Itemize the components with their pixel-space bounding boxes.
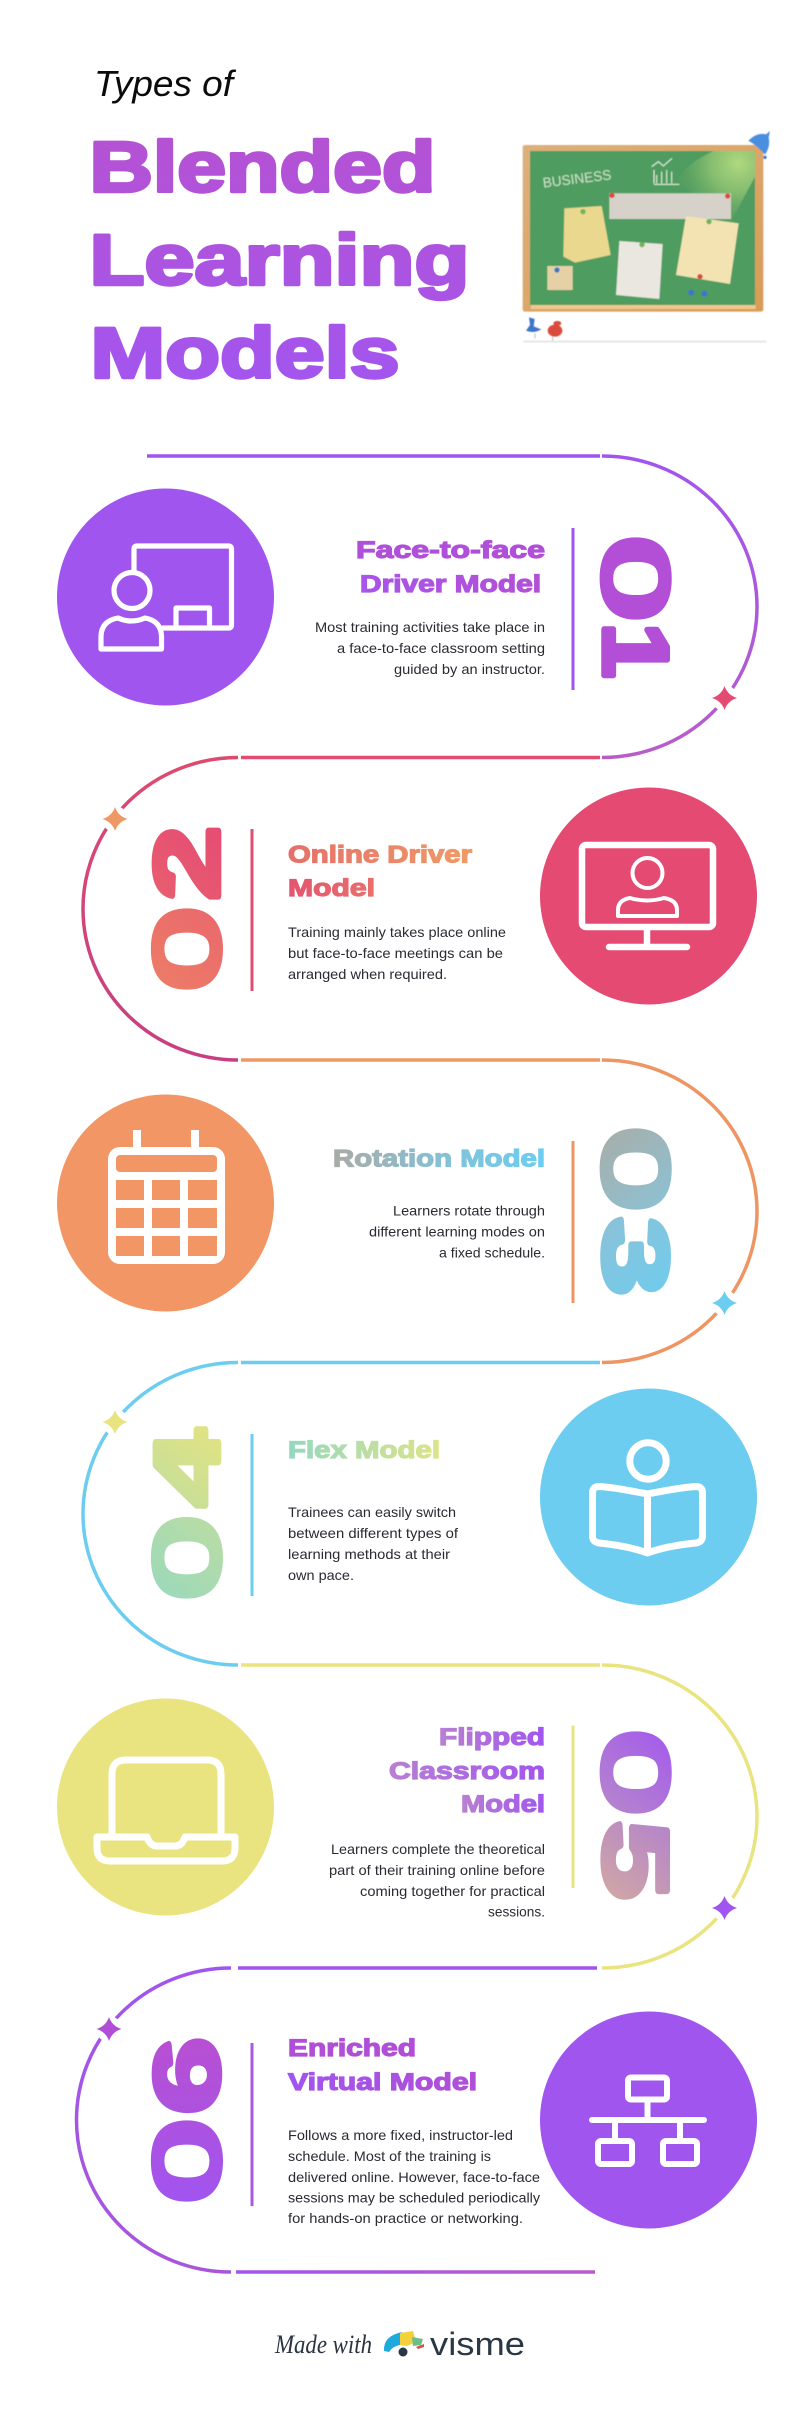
- divider line: [572, 1726, 574, 1888]
- script text: Made with: Made with: [274, 2330, 372, 2359]
- number 06: 0: [137, 2120, 239, 2202]
- description: a fixed schedule.: [439, 1244, 545, 1260]
- description: Training mainly takes place online: [288, 924, 506, 940]
- heading: Flex Model: [288, 1437, 440, 1464]
- description: Learners complete the theoretical: [331, 1841, 545, 1857]
- heading: Online Driver: [288, 842, 472, 868]
- heading: [356, 537, 545, 598]
- panel 06: Enriched Virtual Model: [96, 2012, 757, 2228]
- heading: [389, 1724, 545, 1818]
- title: Types of Blended Learning Models: [90, 63, 470, 394]
- heading: Face-to-face: [356, 537, 545, 564]
- star marker: [712, 685, 738, 711]
- wordmark: visme: visme: [430, 2326, 525, 2362]
- heading: [288, 2035, 477, 2096]
- description: for hands-on practice or networking.: [288, 2210, 523, 2226]
- panel 03: Rotation Model: [57, 1094, 738, 1316]
- description: [315, 619, 545, 677]
- heading: Flipped: [439, 1724, 545, 1751]
- description: [288, 924, 506, 982]
- description: schedule. Most of the training is: [288, 2148, 491, 2164]
- divider line: [572, 1141, 574, 1303]
- description: Most training activities take place in: [315, 619, 545, 635]
- description: sessions.: [488, 1904, 545, 1920]
- description: learning methods at their: [288, 1546, 450, 1562]
- number 02: [137, 826, 239, 990]
- description: [288, 2127, 540, 2226]
- icon circle: network hierarchy: [540, 2012, 757, 2228]
- number 04: 4: [137, 1430, 239, 1507]
- timeline path connecting the six models: [76, 456, 757, 2272]
- description: part of their training online before: [329, 1862, 545, 1878]
- heading: Rotation Model: [333, 1146, 545, 1172]
- icon circle: monitor with person: [540, 788, 757, 1004]
- icon: visme logo: [384, 2331, 424, 2356]
- icon circle: calendar: [57, 1094, 274, 1312]
- description: arranged when required.: [288, 966, 447, 982]
- illustration: green bulletin board with notes and pins: BUSINESS: [542, 166, 612, 191]
- divider line: [250, 829, 254, 991]
- number 05: [584, 1731, 686, 1900]
- description: [369, 1202, 545, 1260]
- panel 05: Flipped Classroom Model: [57, 1698, 738, 1921]
- description: Trainees can easily switch: [288, 1504, 456, 1520]
- star marker: [712, 1895, 738, 1921]
- number 05: 0: [584, 1731, 686, 1814]
- panel 01: Face-to-face Driver Model: [57, 488, 738, 711]
- number 03: 3: [584, 1218, 686, 1296]
- description: delivered online. However, face-to-face: [288, 2169, 540, 2185]
- star marker: [712, 1290, 738, 1316]
- description: coming together for practical: [360, 1883, 545, 1899]
- number 04: [137, 1430, 239, 1599]
- heading: Virtual Model: [288, 2069, 477, 2096]
- star marker: [102, 806, 128, 832]
- heading: Model: [461, 1791, 545, 1818]
- panel 04: Flex Model: [102, 1388, 757, 1606]
- description: Follows a more fixed, instructor-led: [288, 2127, 513, 2143]
- star marker: [102, 1409, 128, 1435]
- description: Learners rotate through: [393, 1202, 545, 1218]
- number 05: 5: [584, 1821, 686, 1900]
- number 01: 0: [584, 537, 686, 620]
- number 02: 2: [137, 826, 239, 900]
- description: [329, 1841, 545, 1920]
- description: but face-to-face meetings can be: [288, 945, 503, 961]
- description: guided by an instructor.: [394, 661, 545, 677]
- description: between different types of: [288, 1525, 458, 1541]
- title line: Types of: Types of: [94, 63, 237, 104]
- description: own pace.: [288, 1567, 354, 1583]
- number 01: 1: [584, 623, 686, 678]
- heading: Model: [288, 875, 375, 902]
- icon circle: person reading book: [540, 1388, 757, 1606]
- number 04: 0: [137, 1517, 239, 1599]
- description: sessions may be scheduled periodically: [288, 2190, 540, 2206]
- heading: Enriched: [288, 2035, 416, 2062]
- divider line: [250, 1434, 254, 1596]
- number 03: [584, 1128, 686, 1296]
- divider line: [572, 528, 574, 690]
- star marker: [96, 2016, 122, 2042]
- icon circle: instructor at board: [57, 488, 274, 706]
- title line: Models: Models: [90, 314, 400, 394]
- title line: Blended: Blended: [90, 128, 436, 208]
- heading: [288, 842, 472, 902]
- number 06: [137, 2038, 239, 2202]
- illustration: green bulletin board with notes and pins: [523, 131, 770, 342]
- heading: Driver Model: [360, 571, 541, 598]
- description: [288, 1504, 458, 1583]
- footer: Made with Visme: [274, 2326, 525, 2362]
- number 02: 0: [137, 908, 239, 990]
- title line: Learning: Learning: [90, 222, 470, 300]
- number 06: 6: [137, 2038, 239, 2114]
- number 03: 0: [584, 1128, 686, 1210]
- description: a face-to-face classroom setting: [337, 640, 545, 656]
- icon circle: laptop: [57, 1698, 274, 1916]
- description: different learning modes on: [369, 1224, 545, 1240]
- panel 02: Online Driver Model: [102, 788, 757, 1004]
- divider line: [250, 2043, 254, 2206]
- heading: Classroom: [389, 1758, 545, 1785]
- number 01: [584, 537, 686, 678]
